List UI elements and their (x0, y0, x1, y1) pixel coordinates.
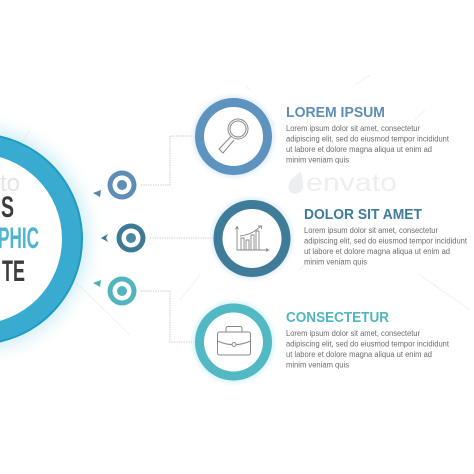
body: dolor sit amet: adipiscing elit, sed do eiusmod tempor incididunt (304, 236, 468, 246)
body: consectetur (286, 329, 450, 370)
body: dolor sit amet (304, 226, 468, 266)
small node 1 (108, 170, 136, 200)
main circle (0, 129, 87, 349)
body: consectetur: ut labore et dolore magna aliqua ut enim ad (286, 350, 432, 359)
main title lines: PHIC (0, 222, 39, 255)
body: lorem ipsum: ut labore et dolore magna aliqua ut enim ad (286, 145, 432, 154)
heading: consectetur: CONSECTETUR (286, 310, 389, 326)
icon: briefcase (218, 326, 250, 355)
body: dolor sit amet: Lorem ipsum dolor sit amet, consectetur (304, 226, 438, 235)
step 1 circle with magnifier icon (193, 96, 274, 177)
body: lorem ipsum: adipiscing elit, sed do eiusmod tempor incididunt (286, 134, 450, 144)
icon: magnifier (219, 119, 248, 153)
watermark: envato: envato (306, 169, 397, 197)
small node 3 (108, 276, 136, 306)
icon: bar chart (236, 226, 268, 252)
step 3 circle with briefcase icon (193, 302, 274, 382)
connector lines (141, 136, 214, 342)
step 2 text (304, 207, 468, 266)
main title lines: S (1, 191, 14, 224)
arrow markers (93, 190, 108, 287)
watermark: envato (288, 169, 397, 197)
body: dolor sit amet: minim veniam quis (304, 258, 367, 266)
body: lorem ipsum: minim veniam quis (286, 156, 349, 164)
main title lines (0, 191, 39, 288)
body: dolor sit amet: ut labore et dolore magna aliqua ut enim ad (304, 247, 450, 256)
watermark: partial envato left: to (0, 170, 20, 197)
body: consectetur: minim veniam quis (286, 360, 349, 370)
step 1 text (286, 105, 450, 164)
body: consectetur: Lorem ipsum dolor sit amet, consectetur (286, 329, 420, 338)
main title lines: TE (2, 255, 25, 288)
step 2 circle with chart icon (212, 198, 292, 279)
heading: lorem ipsum: LOREM IPSUM (286, 105, 385, 121)
heading: dolor sit amet: DOLOR SIT AMET (304, 207, 422, 223)
body: lorem ipsum: Lorem ipsum dolor sit amet, consectetur (286, 124, 420, 133)
body: lorem ipsum (286, 124, 450, 164)
small node 2 (116, 224, 146, 252)
watermark strokes (20, 75, 470, 335)
body: consectetur: adipiscing elit, sed do eiusmod tempor incididunt (286, 340, 450, 348)
step 3 text (286, 310, 450, 370)
